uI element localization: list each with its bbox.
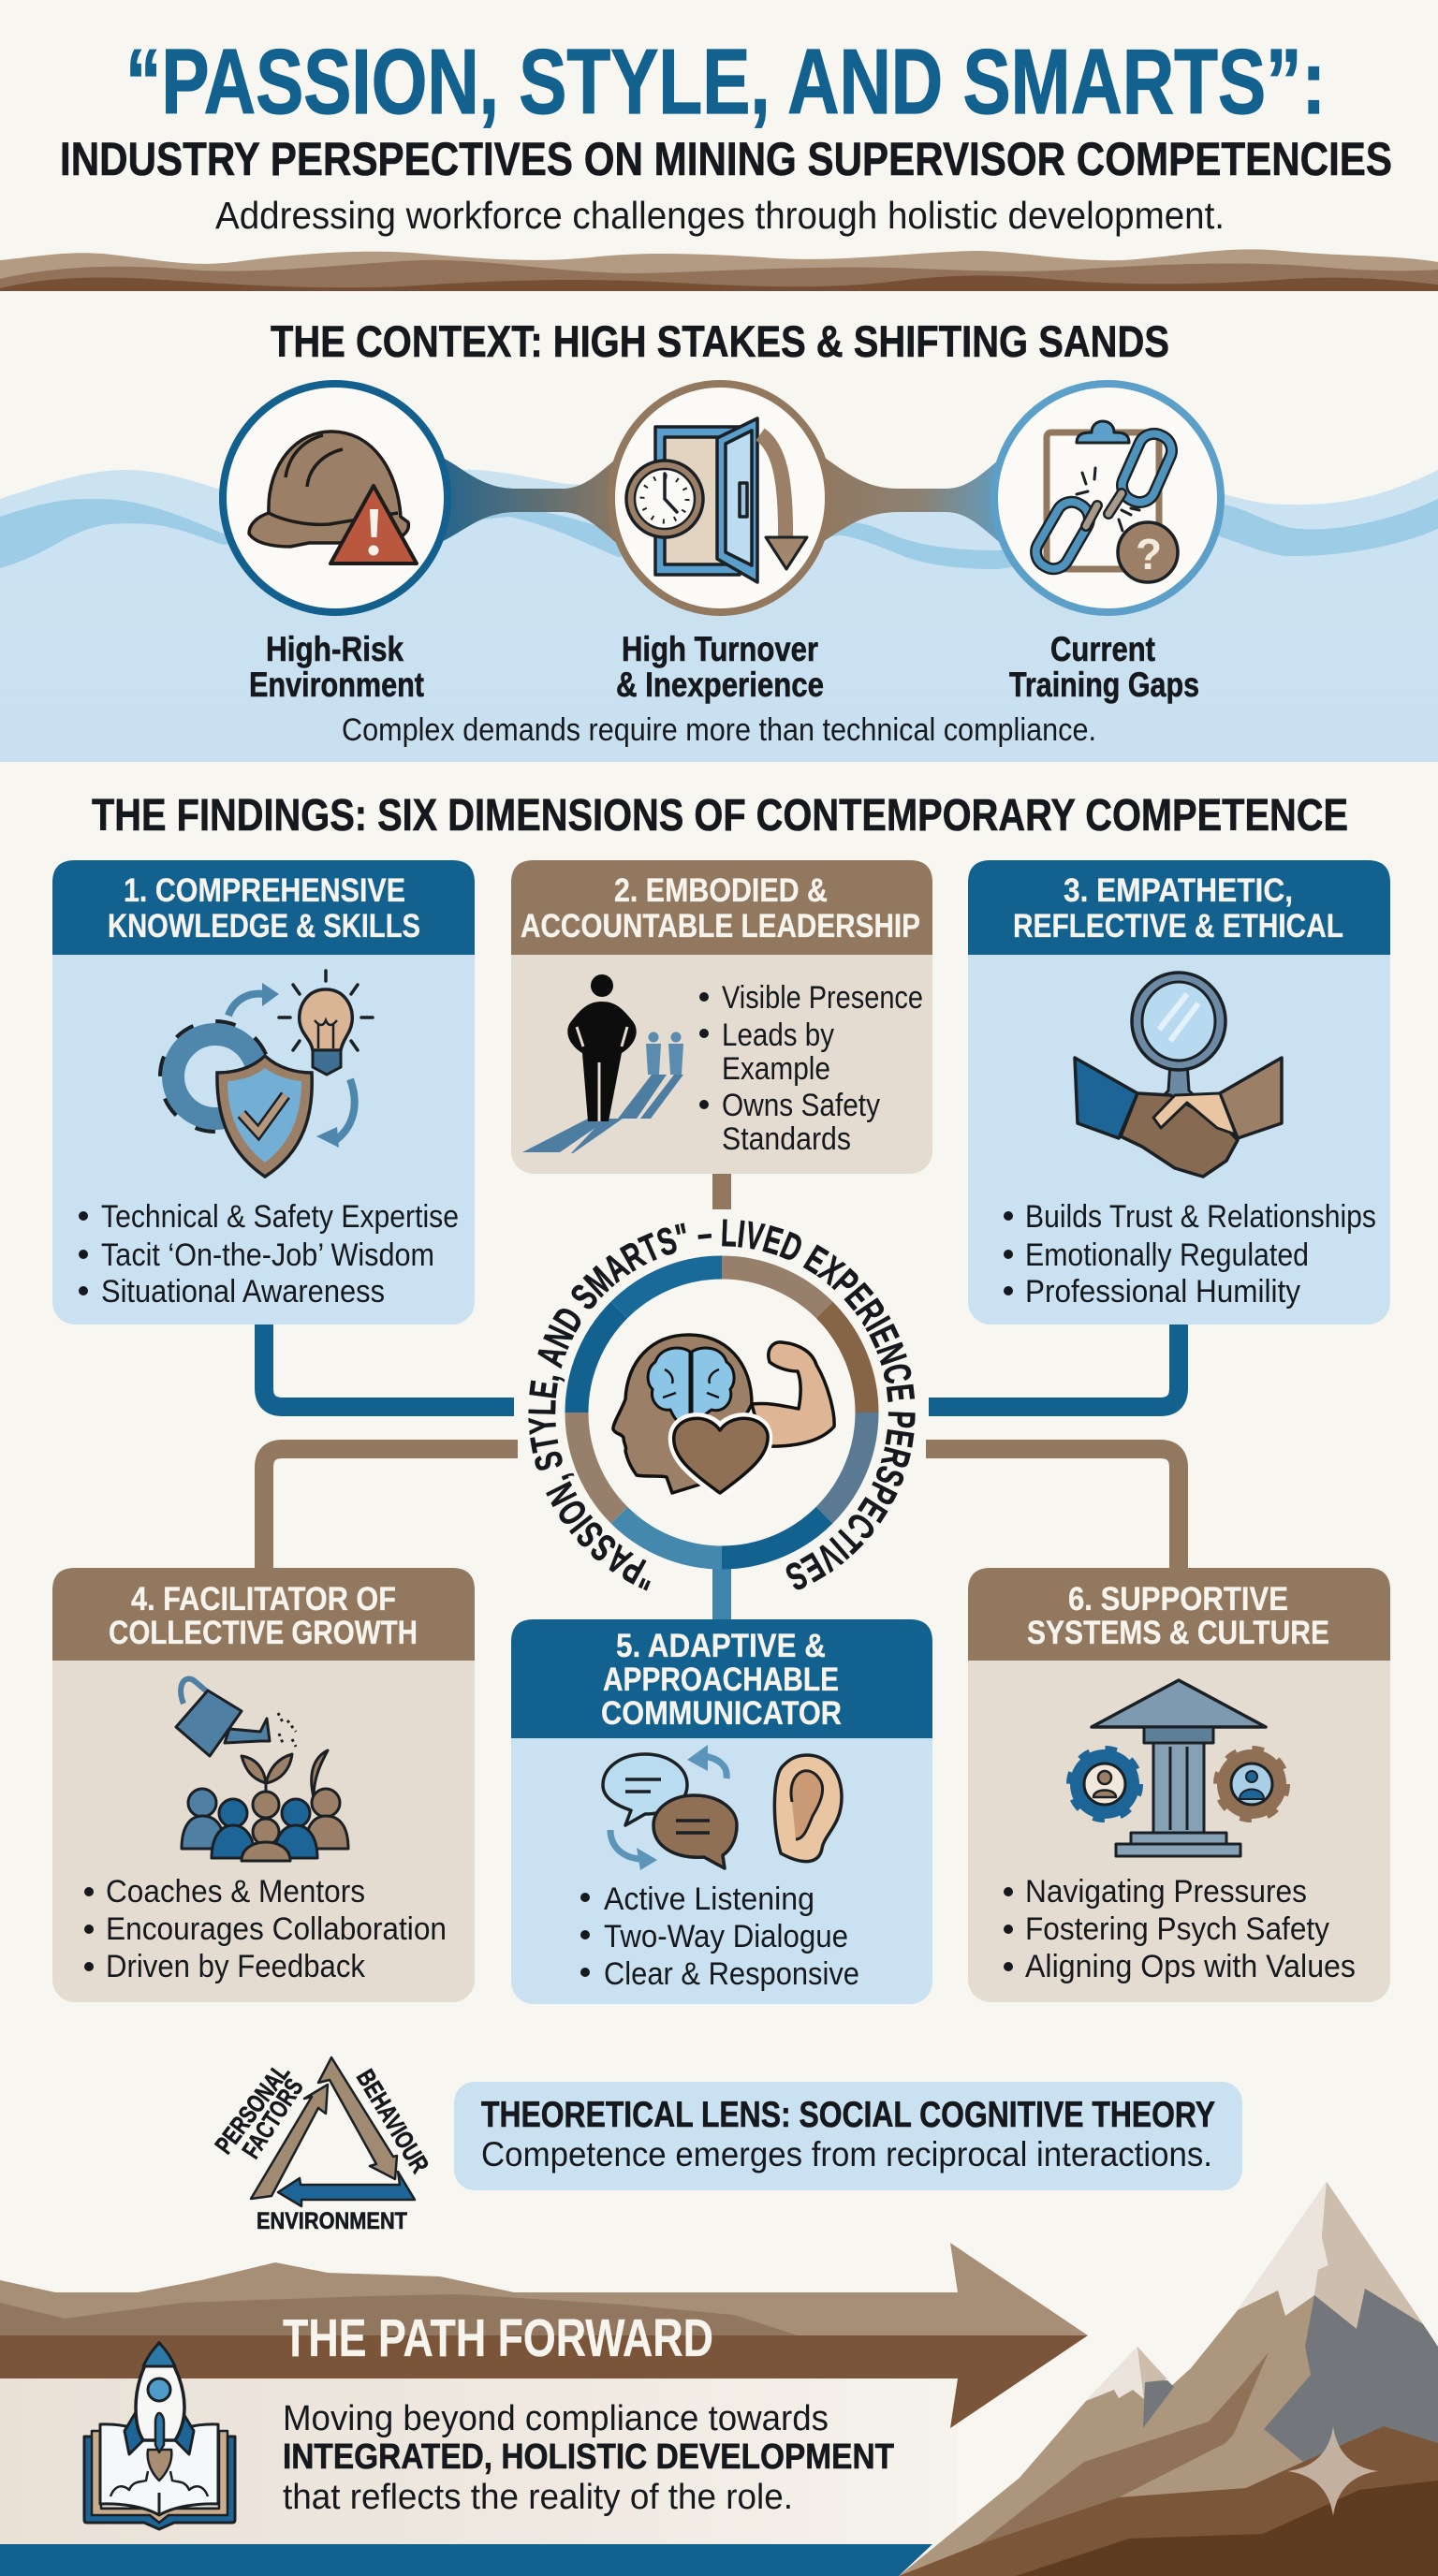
path forward text: Moving beyond compliance towards — [283, 2399, 829, 2438]
label: training gaps — [1009, 630, 1199, 704]
icon: watering can, sprout, team — [176, 1678, 348, 1861]
card 1 title — [108, 872, 420, 944]
path forward text: INTEGRATED, HOLISTIC DEVELOPMENT — [283, 2437, 894, 2477]
panel: card 6 — [968, 1568, 1390, 2002]
card 3 bullets: Emotionally Regulated — [1025, 1237, 1309, 1273]
icon: clock — [626, 461, 703, 537]
icon: question mark badge: ? — [1136, 530, 1162, 578]
card 4 title — [109, 1581, 418, 1651]
card 4 title: COLLECTIVE GROWTH — [109, 1615, 418, 1651]
card 6 bullets: Aligning Ops with Values — [1025, 1949, 1356, 1984]
card 5 bullets: Two-Way Dialogue — [604, 1919, 848, 1954]
footer bar — [0, 2544, 932, 2576]
card 5 bullets — [580, 1881, 859, 1992]
card 4 bullets: Encourages Collaboration — [106, 1911, 447, 1947]
diagram: social cognitive triangle — [210, 2057, 434, 2234]
card 1 bullets — [79, 1199, 459, 1310]
path forward text — [283, 2399, 894, 2517]
label: turnover: High Turnover — [622, 630, 818, 668]
heading: path forward: THE PATH FORWARD — [283, 2308, 713, 2368]
card 6 title: 6. SUPPORTIVE — [1068, 1581, 1288, 1617]
card 4 bullets: Driven by Feedback — [106, 1949, 366, 1984]
header — [60, 30, 1392, 237]
context caption: Complex demands require more than technical compliance. — [342, 712, 1096, 748]
icon: clipboard with broken chain — [1030, 421, 1177, 575]
label: turnover — [616, 630, 824, 704]
card 5 title — [601, 1628, 842, 1732]
card 4 bullets — [84, 1874, 447, 1984]
icon circle: high-risk — [223, 384, 448, 612]
central hub — [528, 1219, 916, 1591]
header wave band — [0, 249, 1438, 291]
icon: rocket and book — [84, 2343, 235, 2529]
tagline: Addressing workforce challenges through holistic development. — [215, 194, 1225, 237]
label: training gaps: Current — [1050, 630, 1155, 668]
connector 1 — [421, 449, 627, 552]
card 5 title: COMMUNICATOR — [601, 1695, 842, 1732]
card 6 bullets — [1004, 1874, 1356, 1984]
triangle labels: FACTORS — [237, 2073, 309, 2163]
card 5 bullets: Clear & Responsive — [604, 1956, 859, 1992]
heading: context: THE CONTEXT: HIGH STAKES & SHIFTING SANDS — [271, 316, 1169, 366]
card 3 title: 3. EMPATHETIC, — [1064, 872, 1293, 909]
path forward text: that reflects the reality of the role. — [283, 2478, 793, 2517]
card 2 title — [521, 872, 920, 944]
triangle labels: PERSONAL — [210, 2058, 295, 2159]
label: turnover: & Inexperience — [616, 666, 824, 704]
text panel background — [0, 2378, 958, 2544]
icon: leader with shadow and team — [522, 974, 683, 1153]
label: high-risk: Environment — [249, 666, 424, 704]
triangle labels: ENVIRONMENT — [257, 2208, 407, 2234]
icon: warning triangle — [330, 486, 417, 564]
triangle labels: BEHAVIOUR — [351, 2065, 434, 2178]
card 2 bullets: Owns Safety — [722, 1088, 880, 1123]
icon: question mark badge — [1118, 522, 1178, 582]
card 4 bullets: Coaches & Mentors — [106, 1874, 365, 1910]
card 2 bullets: Standards — [722, 1121, 851, 1157]
panel: card 5 — [511, 1619, 932, 2004]
icon: pillar with gears — [1071, 1680, 1285, 1856]
connectors to hub — [264, 1174, 1179, 1621]
card 6 bullets: Navigating Pressures — [1025, 1874, 1307, 1910]
card 2 title: 2. EMBODIED & — [614, 872, 828, 909]
card 2 bullets: Example — [722, 1051, 830, 1087]
card 2 bullets: Leads by — [722, 1017, 834, 1053]
card 5 title: 5. ADAPTIVE & — [616, 1628, 826, 1664]
icon circle: training gaps — [994, 384, 1221, 612]
panel: card 4 — [52, 1568, 475, 2002]
icon: gear, shield, bulb — [165, 971, 373, 1177]
hub ring segments — [577, 1267, 867, 1558]
icon: hard hat — [249, 432, 408, 547]
connector 2 — [811, 449, 1011, 552]
sparkle — [1287, 2426, 1378, 2516]
illustration: mountains — [899, 2182, 1438, 2576]
card 6 bullets: Fostering Psych Safety — [1025, 1911, 1329, 1947]
card 3 bullets: Builds Trust & Relationships — [1025, 1199, 1376, 1235]
icon: mirror and handshake — [1075, 973, 1282, 1177]
callout: theoretical lens: Competence emerges from reciprocal interactions. — [481, 2135, 1212, 2174]
card 2 bullets: Visible Presence — [722, 980, 923, 1016]
card 6 title — [1027, 1581, 1329, 1651]
arrow: path forward — [0, 2243, 1088, 2428]
card 1 title: KNOWLEDGE & SKILLS — [108, 908, 420, 944]
icon: down arrow — [760, 434, 807, 569]
callout: theoretical lens: THEORETICAL LENS: SOCIAL COGNITIVE THEORY — [481, 2095, 1215, 2135]
icon: head, brain, muscle, heart — [613, 1335, 834, 1493]
panel: card 3 — [968, 860, 1390, 1325]
card 3 bullets: Professional Humility — [1025, 1274, 1300, 1310]
card 1 bullets: Tacit ‘On-the-Job’ Wisdom — [101, 1237, 434, 1273]
card 1 title: 1. COMPREHENSIVE — [124, 872, 405, 909]
panel: card 1 — [52, 860, 475, 1325]
panel: card 2 — [511, 860, 932, 1174]
card 5 title: APPROACHABLE — [603, 1661, 839, 1698]
hub circular text: "PASSION, STYLE, AND SMARTS" – LIVED EXPERIENCE PERSPECTIVES — [528, 1219, 916, 1591]
callout: theoretical lens — [454, 2082, 1242, 2190]
card 3 title: REFLECTIVE & ETHICAL — [1013, 908, 1343, 944]
label: training gaps: Training Gaps — [1009, 666, 1199, 704]
label: high-risk — [249, 630, 424, 704]
icon circle: turnover — [611, 384, 829, 612]
card 2 bullets — [699, 980, 923, 1157]
card 3 bullets — [1004, 1199, 1376, 1310]
card 6 title: SYSTEMS & CULTURE — [1027, 1615, 1329, 1651]
card 1 bullets: Situational Awareness — [101, 1274, 385, 1310]
icon: door with clock — [655, 418, 757, 582]
panel: path forward — [0, 2182, 1438, 2576]
card 5 bullets: Active Listening — [604, 1881, 814, 1917]
context waves — [0, 470, 1438, 762]
panel: context — [0, 316, 1438, 762]
card 1 bullets: Technical & Safety Expertise — [101, 1199, 459, 1235]
card 4 title: 4. FACILITATOR OF — [131, 1581, 396, 1617]
card 3 title — [1013, 872, 1343, 944]
label: high-risk: High-Risk — [266, 630, 404, 668]
triangle labels — [210, 2058, 434, 2234]
icon: speech bubbles and ear — [603, 1745, 842, 1870]
card 2 title: ACCOUNTABLE LEADERSHIP — [521, 908, 920, 944]
